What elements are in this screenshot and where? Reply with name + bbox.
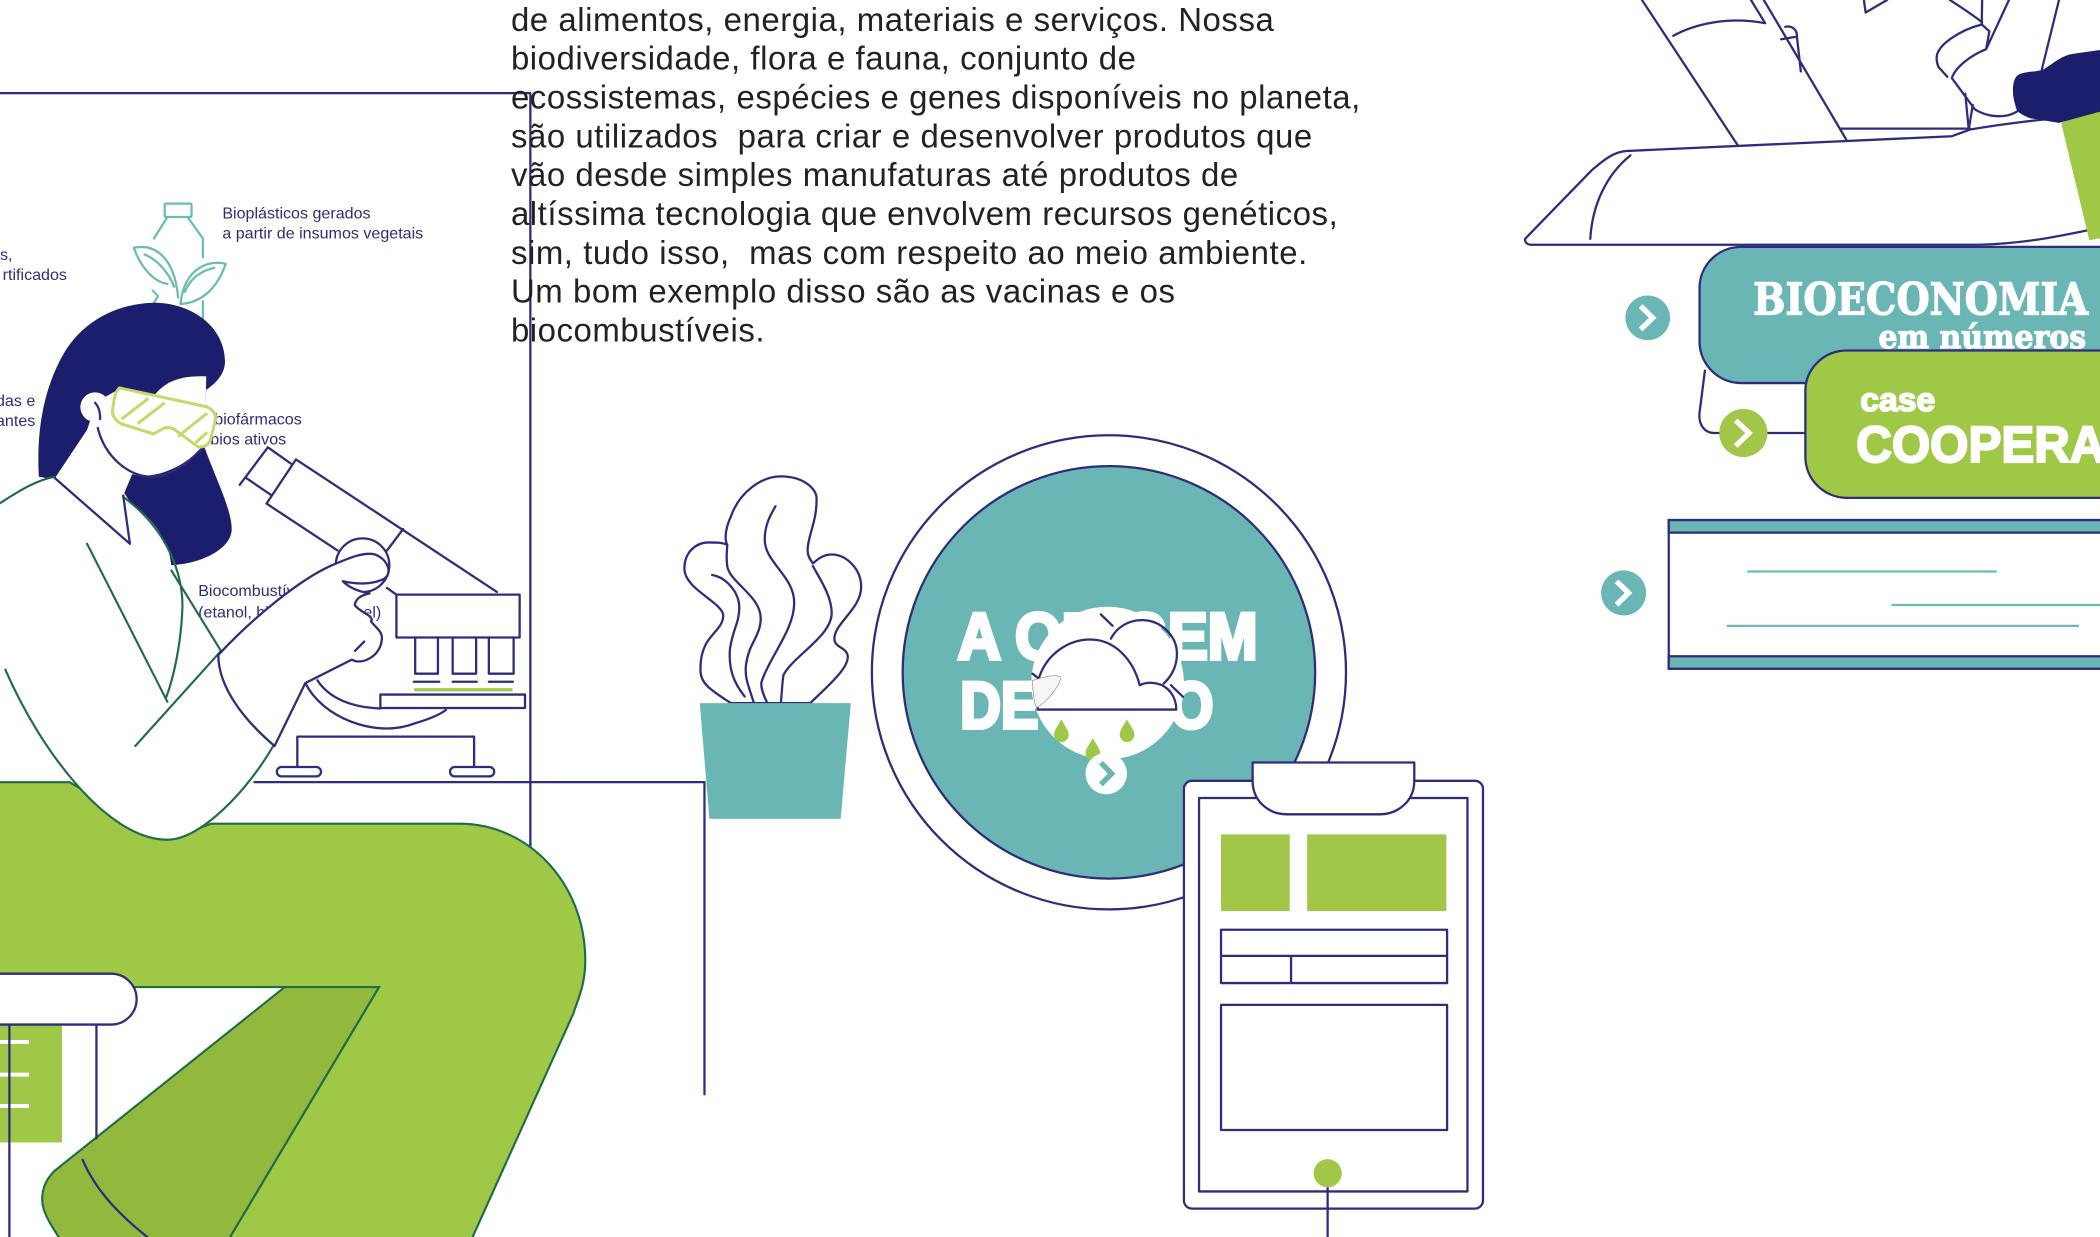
text block: bioeconomy description	[511, 1, 1361, 349]
button: case coopera: case	[1860, 382, 1935, 419]
badge title	[958, 600, 1258, 742]
text block: bioeconomy description: são utilizados para criar e desenvolver produtos que	[511, 117, 1313, 154]
scientist: face and neck	[55, 376, 206, 544]
text block: bioeconomy description: ecossistemas, espécies e genes disponíveis no planeta,	[511, 79, 1361, 116]
book outline behind green button	[1699, 371, 1807, 433]
text block: bioeconomy description: biodiversidade, flora e fauna, conjunto de	[511, 40, 1136, 77]
button: case coopera	[1805, 351, 2100, 498]
icon: bioplastic bottle with leaves	[134, 204, 226, 321]
icon: safety goggles	[112, 388, 216, 447]
figure seated on books: legs outline	[1642, 0, 2059, 145]
labels: bioeconomy products: a partir de insumos vegetais	[222, 224, 423, 242]
scientist: green trousers	[0, 782, 585, 1237]
labels: bioeconomy products: (etanol, biogás, biodiesel)	[198, 603, 381, 621]
badge title: DE TUDO	[960, 669, 1213, 742]
text block: bioeconomy description: de alimentos, energia, materiais e serviços. Nossa	[511, 1, 1274, 38]
text block: bioeconomy description: sim, tudo isso, mas com respeito ao meio ambiente.	[511, 234, 1308, 271]
microscope	[240, 447, 525, 776]
chevron icon green	[1719, 409, 1767, 457]
scientist: hand on microscope knob	[218, 554, 388, 746]
scientist: lab coat	[0, 477, 273, 840]
potted plant	[684, 476, 861, 819]
stool and drawer	[0, 974, 137, 1237]
book	[1669, 520, 2100, 669]
labels: bioeconomy products: rtificados	[3, 266, 67, 284]
figure: shoe and trouser	[1525, 50, 2100, 245]
text block: bioeconomy description: vão desde simples manufaturas até produtos de	[511, 156, 1239, 193]
scientist: hair and beard	[38, 303, 232, 565]
text block: bioeconomy description: altíssima tecnologia que envolvem recursos genéticos,	[511, 195, 1338, 232]
button: bioeconomia em numeros: em números	[1878, 318, 2086, 356]
clipboard	[1184, 762, 1483, 1237]
button: bioeconomia em numeros	[1700, 247, 2100, 383]
chevron icon teal bottom	[1601, 570, 1646, 615]
labels: bioeconomy products: bios ativos	[210, 431, 286, 449]
text block: bioeconomy description: Um bom exemplo disso são as vacinas e os	[511, 273, 1175, 310]
labels: bioeconomy products	[0, 204, 423, 621]
badge title: A ORIGEM	[958, 600, 1258, 673]
table outline	[254, 782, 704, 1094]
badge: a origem de tudo	[872, 435, 1346, 909]
chevron icon teal top	[1625, 295, 1670, 340]
labels: bioeconomy products: Bioplásticos gerados	[222, 204, 371, 222]
icon: rain cloud	[1031, 607, 1184, 761]
labels: bioeconomy products: biofármacos	[214, 411, 302, 429]
text block: bioeconomy description: biocombustíveis.	[511, 312, 765, 349]
labels: bioeconomy products: s,	[0, 246, 12, 264]
labels: bioeconomy products: Biocombustíveis	[198, 582, 315, 600]
icon: chevron button	[1085, 753, 1127, 794]
panel: outline frame behind scientist	[0, 93, 530, 857]
